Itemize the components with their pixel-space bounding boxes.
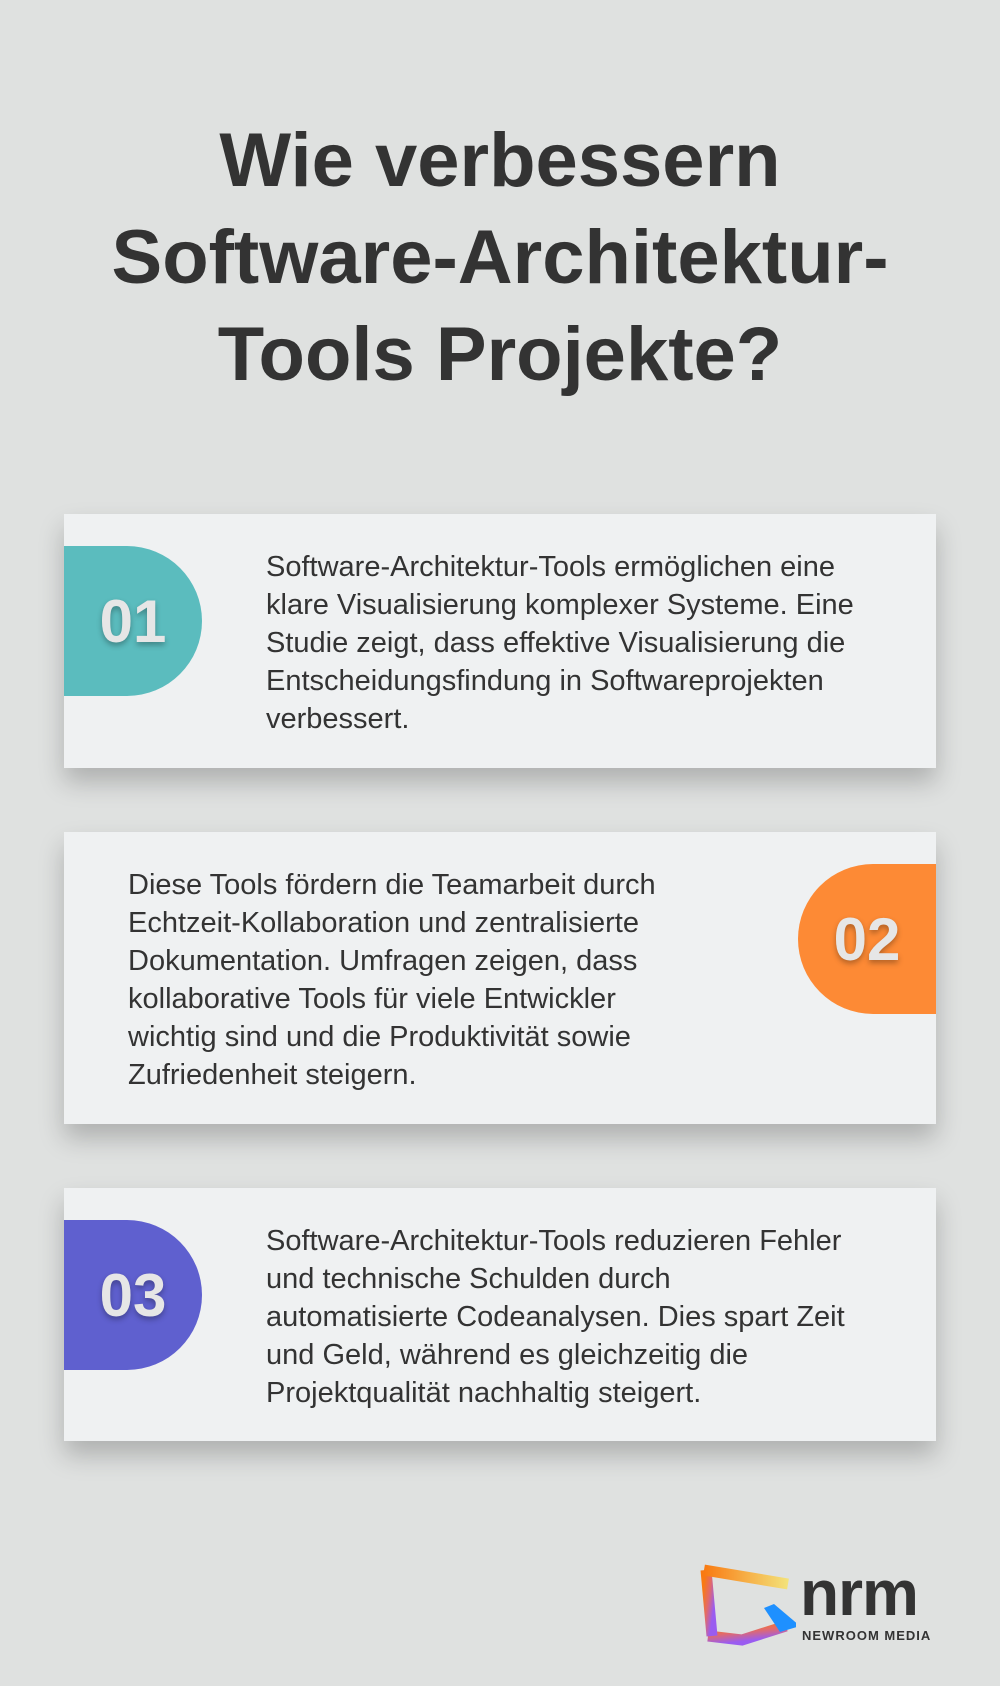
text 3: und technische Schulden durch xyxy=(266,1263,671,1295)
title xyxy=(112,118,888,397)
text 2: wichtig sind und die Produktivität sowie xyxy=(128,1021,631,1053)
title: Wie verbessern xyxy=(219,118,781,203)
badge 03 xyxy=(64,1220,202,1370)
panel: card 3 xyxy=(64,1188,936,1441)
text 1: Studie zeigt, dass effektive Visualisierung die xyxy=(266,627,845,659)
badge 03: 03 xyxy=(100,1262,166,1328)
badge 01 xyxy=(64,546,202,696)
text 2: Diese Tools fördern die Teamarbeit durch xyxy=(128,869,656,901)
logo text: nrm xyxy=(800,1557,918,1629)
panel: card 2 xyxy=(64,832,936,1124)
title: Tools Projekte? xyxy=(218,312,782,397)
text 3: und Geld, während es gleichzeitig die xyxy=(266,1339,748,1371)
title: Software-Architektur- xyxy=(112,215,888,300)
text 1: klare Visualisierung komplexer Systeme. Eine xyxy=(266,589,854,621)
text 1: Entscheidungsfindung in Softwareprojekten xyxy=(266,665,824,697)
text 1: verbessert. xyxy=(266,703,409,735)
text 3: Software-Architektur-Tools reduzieren Fehler xyxy=(266,1225,841,1257)
text 3: Projektqualität nachhaltig steigert. xyxy=(266,1377,701,1409)
text 2: Zufriedenheit steigern. xyxy=(128,1059,417,1091)
badge 01: 01 xyxy=(100,588,166,654)
badge 02: 02 xyxy=(834,906,900,972)
text 3 xyxy=(266,1225,845,1409)
logo xyxy=(700,1557,931,1646)
badge 02 xyxy=(798,864,936,1014)
text 1: Software-Architektur-Tools ermöglichen eine xyxy=(266,551,835,583)
text 2: Echtzeit-Kollaboration und zentralisierte xyxy=(128,907,639,939)
icon: logo mark xyxy=(700,1564,796,1646)
text 2: kollaborative Tools für viele Entwickler xyxy=(128,983,616,1015)
text 1 xyxy=(266,551,854,735)
panel: card 1 xyxy=(64,514,936,768)
logo: NEWROOM MEDIA xyxy=(802,1628,931,1643)
text 2 xyxy=(128,869,656,1091)
text 2: Dokumentation. Umfragen zeigen, dass xyxy=(128,945,637,977)
text 3: automatisierte Codeanalysen. Dies spart Zeit xyxy=(266,1301,845,1333)
